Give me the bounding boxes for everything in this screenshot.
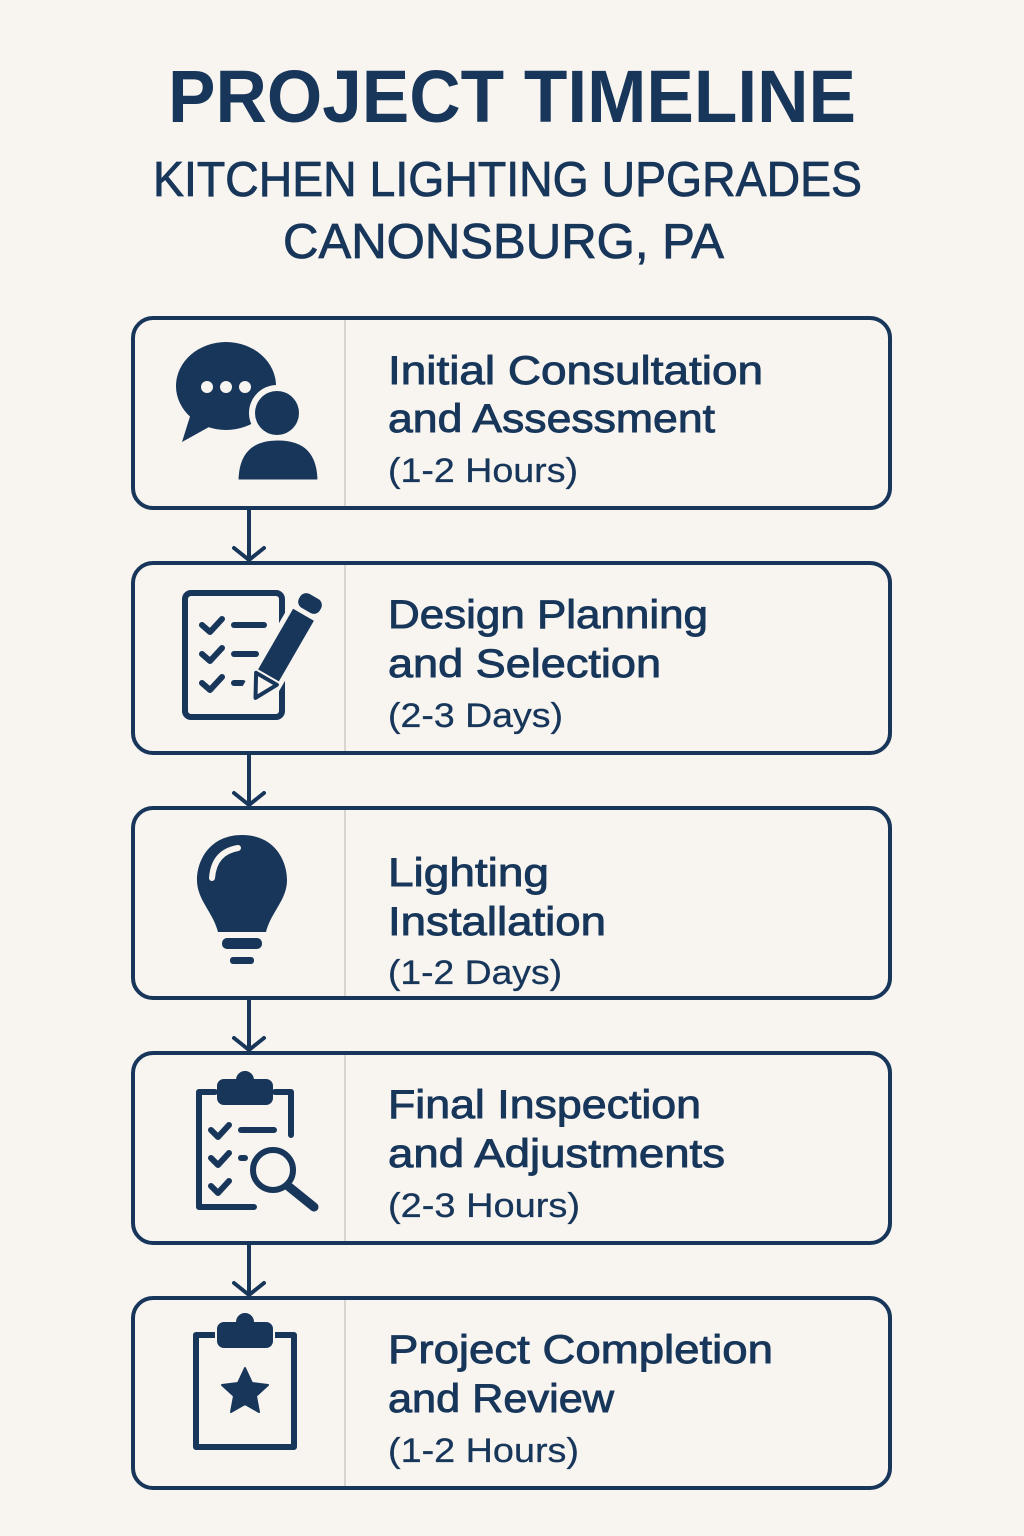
panel: step 1: [133, 318, 890, 508]
panel: step 2: Design Planning: [388, 593, 708, 637]
subtitle: KITCHEN LIGHTING UPGRADES: [153, 153, 862, 207]
panel: step 2: (2-3 Days): [388, 697, 563, 735]
panel: step 2: and Selection: [388, 642, 661, 686]
icon: checklist with pencil: [185, 586, 330, 717]
panel: step 3: (1-2 Days): [388, 954, 562, 992]
panel: step 1: and Assessment: [388, 397, 715, 441]
panel: step 5: Project Completion: [388, 1328, 773, 1372]
panel: step 2: [133, 563, 890, 753]
panel: step 4: Final Inspection: [388, 1083, 701, 1127]
arrow 1: [234, 509, 264, 560]
panel: step 3: Installation: [388, 900, 606, 944]
panel: step 1: (1-2 Hours): [388, 452, 578, 490]
arrow 3: [234, 999, 264, 1050]
panel: step 5: (1-2 Hours): [388, 1432, 579, 1470]
panel: step 4: and Adjustments: [388, 1132, 725, 1176]
subtitle: CANONSBURG, PA: [283, 215, 724, 269]
arrow 4: [234, 1244, 264, 1295]
panel: step 5: and Review: [388, 1377, 614, 1421]
panel: step 1: Initial Consultation: [388, 349, 763, 393]
panel: step 3: Lighting: [388, 851, 549, 895]
title: PROJECT TIMELINE: [168, 55, 856, 138]
icon: clipboard with star: [196, 1316, 294, 1447]
arrow 2: [234, 754, 264, 805]
panel: step 5: [133, 1298, 890, 1488]
icon: chat bubble with person: [176, 342, 320, 482]
panel: step 4: (2-3 Hours): [388, 1187, 580, 1225]
panel: step 4: [133, 1053, 890, 1243]
panel: step 3: [133, 808, 890, 998]
icon: clipboard with magnifier: [199, 1074, 314, 1207]
icon: light bulb: [197, 835, 287, 964]
subtitle: [153, 153, 862, 269]
